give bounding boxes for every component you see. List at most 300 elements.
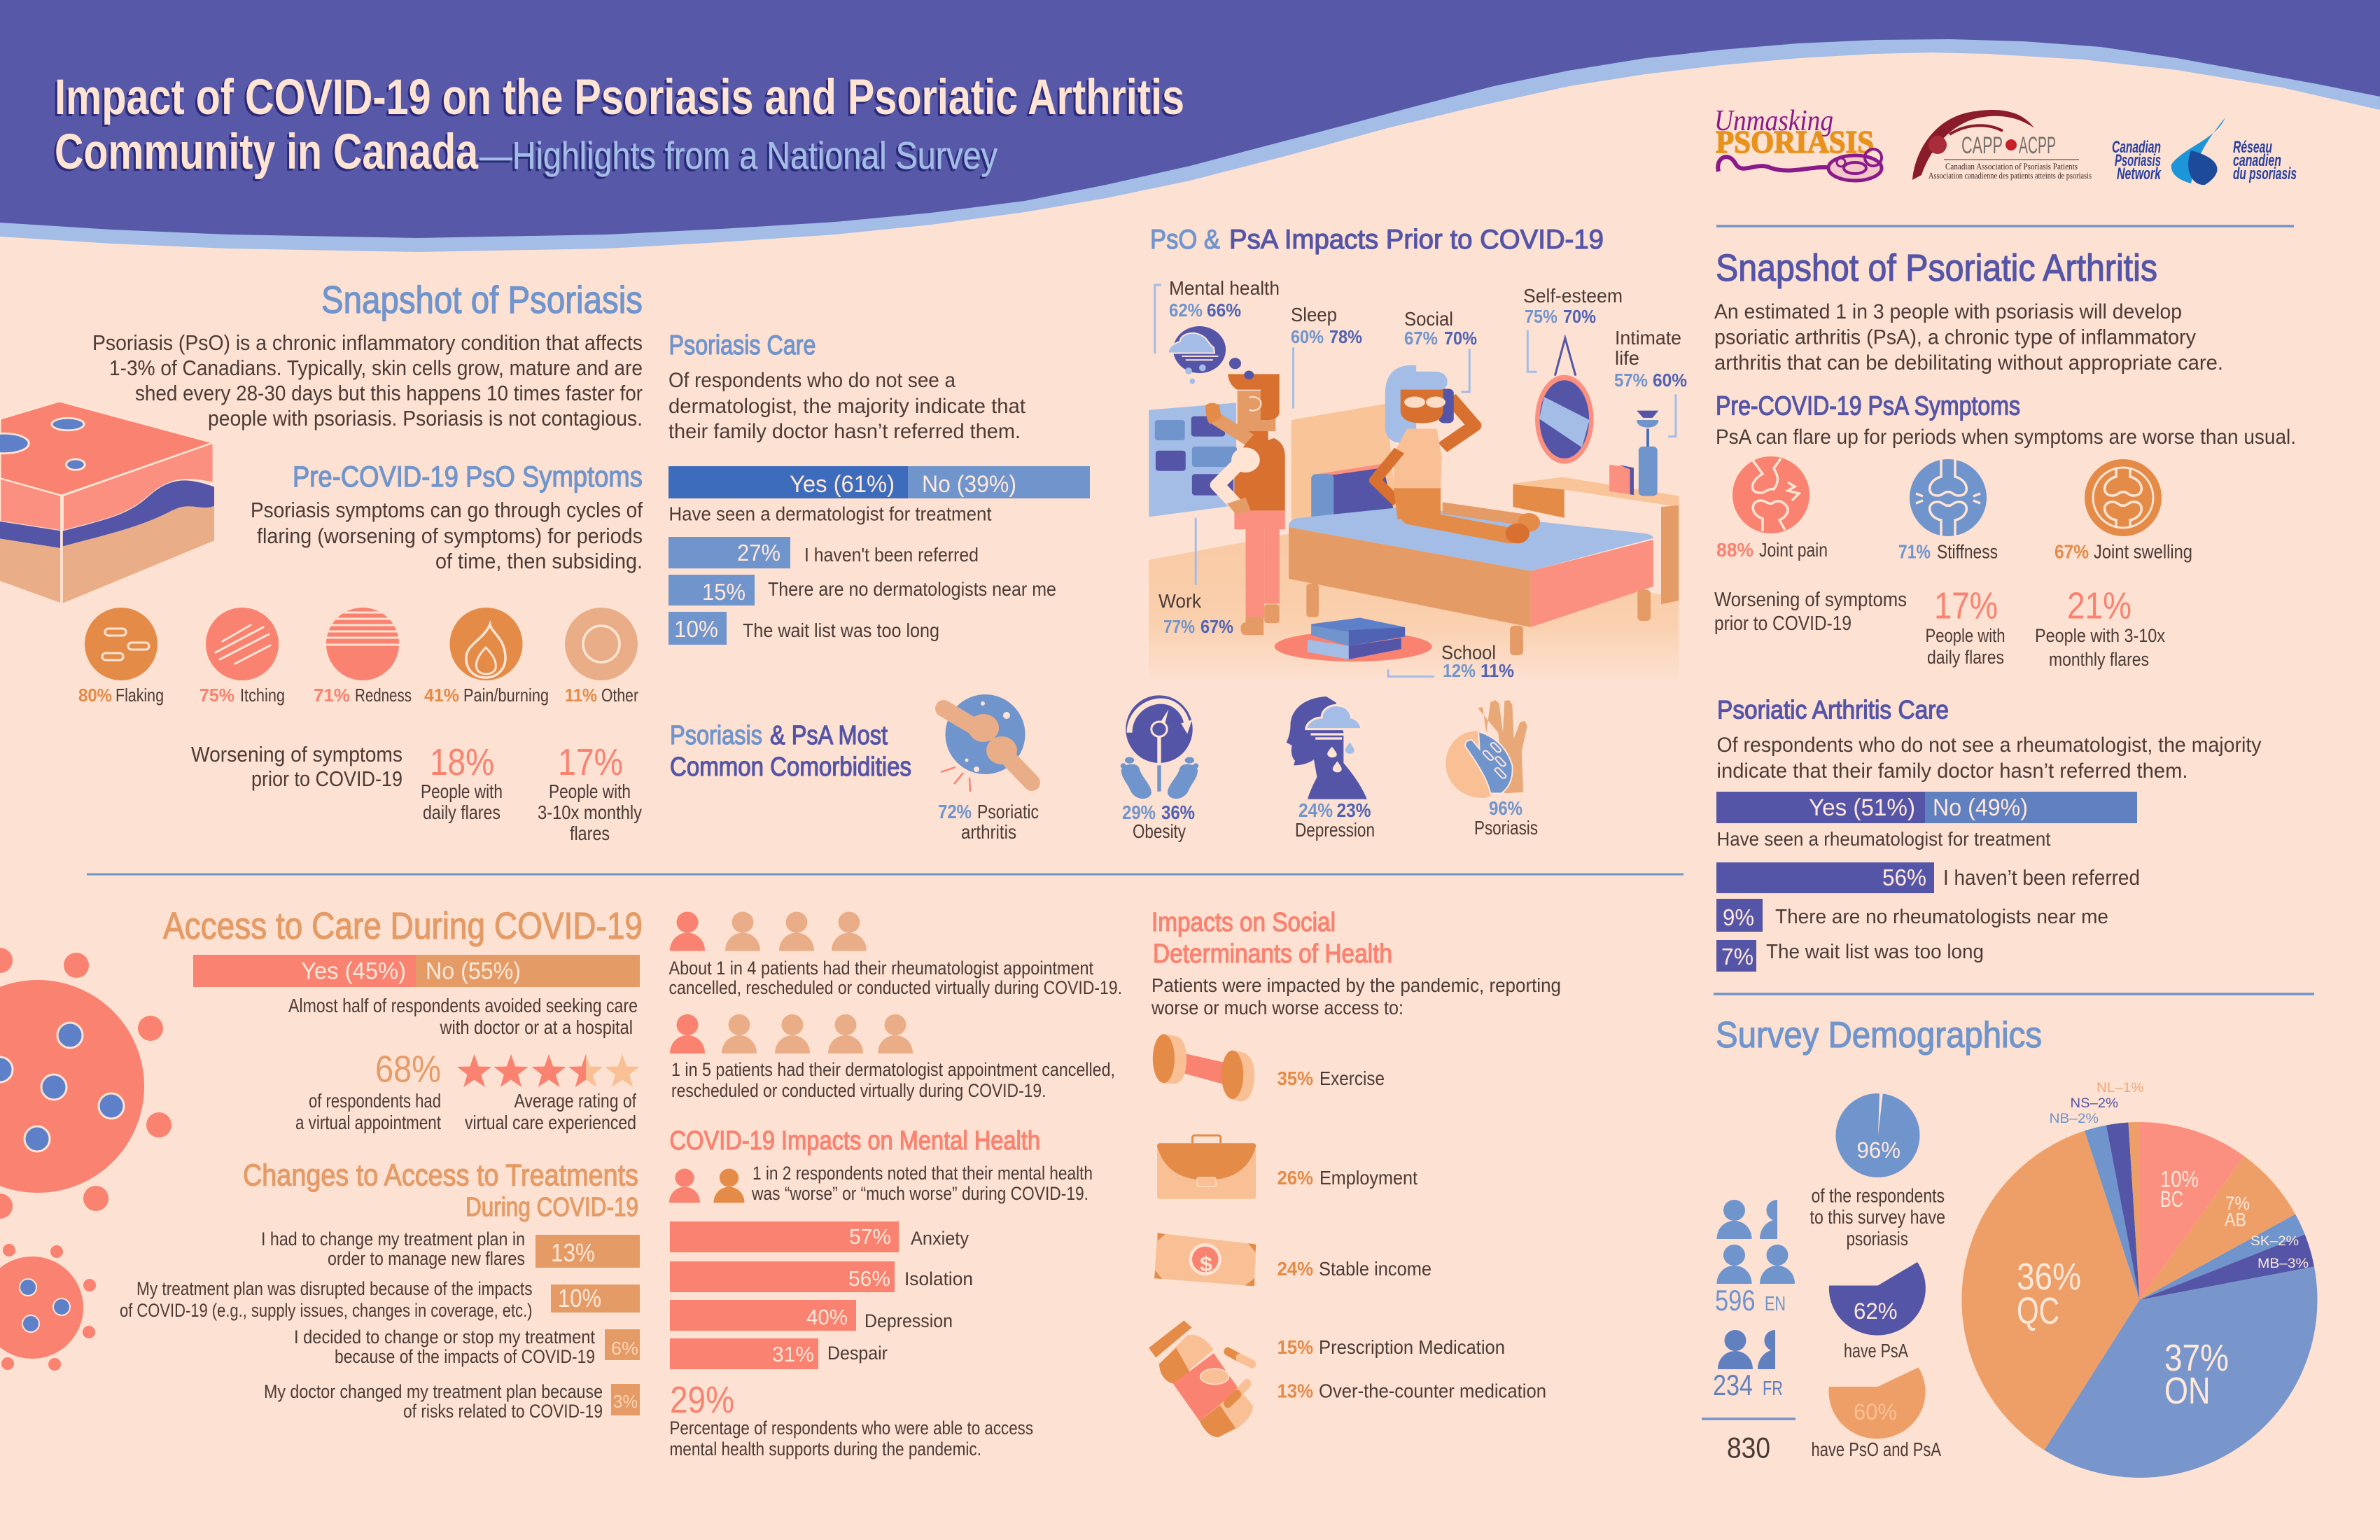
caption (288, 995, 638, 1038)
care text: dermatologist, the majority indicate that (668, 395, 1026, 418)
logo: CAPP ACPP: ACPP (2019, 132, 2056, 159)
label: employment (1277, 1167, 1418, 1189)
symptom labels: Itching (240, 685, 285, 706)
logo: Canadian Psoriasis Network: Canadian (2112, 138, 2161, 157)
stacked bar: yes no rheumatologist: Yes (51%) (1809, 794, 1915, 821)
heading: changes to access: Changes to Access to Treatments (243, 1158, 638, 1193)
heading: Snapshot of Psoriatic Arthritis (1716, 247, 2157, 289)
label: self-esteem: Self-esteem (1523, 285, 1623, 307)
bar chart: mental health impacts: Despair (827, 1343, 888, 1364)
label: stable income: Stable income (1319, 1258, 1432, 1280)
label: intimate life: 57% (1614, 370, 1648, 391)
illustration: skin layers block (0, 401, 214, 603)
stacked bar: avoided care: Yes (45%) (301, 958, 406, 984)
row: plan disrupted (120, 1278, 640, 1321)
label: obesity (1122, 802, 1195, 842)
logo: CAPP ACPP: CAPP (1961, 132, 2003, 159)
label: over-the-counter medication: Over-the-counter medication (1319, 1380, 1546, 1401)
illustration: bedroom scene (1149, 285, 1679, 682)
icon: joint (941, 694, 1032, 792)
label: joint swelling: Joint swelling (2094, 540, 2192, 563)
heading: PsA Impacts Prior to COVID-19 (1229, 225, 1604, 255)
panel: snapshot of psoriasis (0, 278, 643, 844)
label: stable income (1277, 1258, 1432, 1280)
people: french respondents: FR (1763, 1378, 1783, 1400)
label: intimate life: Intimate (1615, 327, 1681, 349)
label: work: Work (1158, 590, 1202, 612)
label: obesity: Obesity (1133, 820, 1186, 842)
heading: Psoriasis (670, 721, 762, 750)
worsening of psa symptoms: Worsening of symptoms (1714, 589, 1907, 611)
label: mental health: 66% (1207, 300, 1241, 321)
care text: Of respondents who do not see a (668, 369, 955, 392)
heading: Psoriasis Care (669, 330, 816, 360)
label: depression: 23% (1337, 799, 1371, 821)
stacked bar: yes no dermatologist (668, 466, 1090, 498)
label: social: 70% (1444, 328, 1477, 349)
heading: Determinants of Health (1153, 939, 1392, 969)
bar: wait list: The wait list was too long (1766, 941, 1984, 963)
worsening of symptoms: flares (570, 822, 610, 844)
icon: dumbbell (1153, 1034, 1254, 1102)
text: worse or much worse access to: (1151, 997, 1404, 1018)
pie chart: provinces: ON (2164, 1370, 2211, 1412)
people: english respondents: 596 (1715, 1284, 1756, 1317)
bar chart: mental health impacts: 57% (849, 1224, 891, 1249)
bar chart: mental health impacts: Isolation (904, 1268, 973, 1289)
intro text: people with psoriasis. Psoriasis is not contagious. (208, 406, 643, 430)
label: exercise: Exercise (1320, 1068, 1385, 1089)
stat: mental health supports: Percentage of respondents who were able to access (669, 1418, 1033, 1438)
panel: comorbidities (670, 694, 1538, 843)
text: rheumatologist appointments: cancelled, rescheduled or conducted virtually during COVID-19. (669, 977, 1122, 998)
intro text: An estimated 1 in 3 people with psoriasis will develop (1714, 300, 2182, 323)
logo: Canadian Psoriasis Network: Réseau (2233, 138, 2272, 157)
row: decided to stop: because of the impacts of COVID-19 (335, 1346, 595, 1367)
icon: briefcase (1157, 1135, 1256, 1199)
pie chart: provinces: BC (2160, 1186, 2183, 1212)
logo: Canadian Psoriasis Network: Psoriasis (2115, 151, 2161, 170)
bar: wait list: The wait list was too long (743, 620, 939, 641)
heading (1152, 908, 1392, 969)
bar: not referred: 56% (1882, 864, 1926, 890)
text: 1 in 2 respondents (751, 1163, 1093, 1204)
bar: no dermatologists: 15% (702, 579, 746, 605)
caption: have pso and psa: have PsO and PsA (1812, 1438, 1941, 1460)
label: school: 11% (1480, 660, 1514, 681)
label: depression: 24% (1298, 799, 1333, 821)
text: dermatologist appointments: 1 in 5 patients had their dermatologist appointment cancelled, (671, 1059, 1115, 1080)
label: exercise (1277, 1068, 1385, 1089)
logo: Canadian Psoriasis Network: Network (2117, 164, 2162, 183)
label: sleep: 78% (1329, 326, 1362, 347)
title: Impact of COVID-19 on the Psoriasis and Psoriatic Arthritis (52, 72, 1182, 127)
label: sleep: Sleep (1291, 304, 1337, 326)
mini pie: 62 percent: 62% (1854, 1298, 1897, 1324)
worsening of psa symptoms: People with 3-10x (2035, 625, 2165, 646)
stacked bar: yes no dermatologist: Yes (61%) (790, 471, 895, 498)
heading: pre-covid psa symptoms: Pre-COVID-19 PsA Symptoms (1716, 392, 2020, 421)
logo: Unmasking Psoriasis: PSORIASIS (1716, 124, 1874, 160)
bar: no rheumatologists: 9% (1723, 904, 1754, 930)
bar chart: mental health impacts: 40% (806, 1305, 848, 1329)
logo: Canadian Psoriasis Network: du psoriasis (2233, 164, 2297, 183)
mini pie: 96 percent: 96% (1856, 1138, 1900, 1163)
bar chart: mental health impacts: Depression (864, 1310, 953, 1331)
people: 1 in 4 (670, 911, 867, 951)
symptom labels: Pain/burning (463, 685, 549, 706)
caption: 96 percent: psoriasis (1847, 1228, 1908, 1250)
people: french respondents: 234 (1713, 1368, 1753, 1401)
caption: Have seen a dermatologist for treatment (669, 503, 992, 525)
label: stiffness: 71% (1898, 540, 1931, 563)
logo: CAPP ACPP (1912, 110, 2092, 181)
stat: virtual appointment: 68% (375, 1049, 441, 1091)
label: prescription medication: Prescription Medication (1319, 1336, 1505, 1358)
mini pie: 60 percent: 60% (1854, 1399, 1897, 1424)
care text: their family doctor hasn’t referred them. (668, 420, 1021, 443)
symptoms text: of time, then subsiding. (435, 549, 643, 573)
icon: flaking (85, 608, 158, 680)
people: english respondents: EN (1765, 1293, 1786, 1315)
symptoms text: Psoriasis symptoms can go through cycles of (251, 498, 643, 522)
row: manage new flares: order to manage new flares (328, 1248, 525, 1269)
label: psoriatic arthritis (938, 801, 1039, 843)
label: psoriatic arthritis: Psoriatic (977, 801, 1039, 822)
pie chart: provinces: MB–3% (2258, 1256, 2309, 1271)
people: french respondents (1713, 1330, 1783, 1401)
text: 1 in 2 respondents: 1 in 2 respondents noted that their mental health (752, 1163, 1093, 1184)
panel: psoriatic arthritis care (1716, 696, 2261, 972)
pie chart: provinces (1961, 1122, 2318, 1478)
label: intimate life: life (1615, 347, 1639, 369)
panel: survey demographics (1702, 1015, 2318, 1478)
heading: Survey Demographics (1716, 1015, 2042, 1056)
bar: wait list (668, 612, 939, 645)
label: work: 67% (1200, 616, 1233, 637)
worsening of psa symptoms: prior to COVID-19 (1714, 612, 1851, 635)
label: psoriatic arthritis: 72% (938, 801, 972, 822)
caption: 96 percent (1810, 1184, 1945, 1250)
bar: no rheumatologists (1716, 899, 2108, 932)
label: joint swelling: 67% (2054, 540, 2089, 563)
people: 1 in 5 (670, 1014, 913, 1054)
stat: mental health supports: 29% (670, 1379, 734, 1421)
heading: Snapshot of Psoriasis (321, 278, 643, 321)
logo: Canadian Psoriasis Network: canadien (2233, 151, 2281, 170)
total respondents: 830 (1727, 1431, 1770, 1464)
stacked bar: yes no dermatologist: No (39%) (922, 471, 1016, 498)
label: employment: 26% (1277, 1167, 1313, 1189)
pie chart: provinces: QC (2017, 1290, 2059, 1332)
worsening of psa symptoms: People with (1925, 625, 2005, 646)
label: depression: Depression (1295, 819, 1375, 841)
label: social: 67% (1404, 328, 1438, 349)
label: joint pain (1716, 539, 1828, 561)
label: school: School (1441, 641, 1496, 664)
intro text (1714, 300, 2223, 374)
bar chart: mental health impacts: 31% (772, 1342, 814, 1366)
label: mental health: 62% (1169, 300, 1203, 321)
bar: no dermatologists (668, 575, 1056, 606)
symptoms text: flaring (worsening of symptoms) for periods (257, 524, 643, 548)
bar: not referred: 27% (737, 540, 780, 566)
label: depression (1295, 799, 1375, 841)
icon: depression head (1287, 696, 1367, 799)
logo: Unmasking Psoriasis (1714, 105, 1882, 181)
stat: virtual appointment (295, 1049, 441, 1133)
row: doctor changed plan: 3% (613, 1391, 638, 1412)
logo: Unmasking Psoriasis: Unmasking (1714, 105, 1833, 137)
symptom labels (78, 685, 638, 706)
pie chart: provinces: 7% (2225, 1193, 2250, 1214)
worsening of psa symptoms: monthly flares (2049, 649, 2149, 670)
title: —Highlights from a National Survey (477, 136, 995, 179)
pie labels outside: NB–2% (2050, 1112, 2099, 1126)
label: joint swelling (2054, 540, 2192, 563)
heading: pre-covid symptoms: Pre-COVID-19 PsO Symptoms (293, 460, 643, 493)
care text: Of respondents who do not see a rheumatologist, the majority (1716, 734, 2261, 757)
worsening of symptoms: 17% (558, 741, 623, 783)
text: rheumatologist appointments (669, 958, 1122, 998)
caption: with doctor or at a hospital (440, 1016, 633, 1038)
row: plan disrupted: 10% (558, 1284, 601, 1312)
panel: impacts prior to covid (1149, 225, 1687, 682)
star rating: virtual care experienced (465, 1112, 636, 1133)
bar: no dermatologists: There are no dermatologists near me (768, 578, 1056, 600)
logo: CAPP ACPP: Canadian Association of Psoriasis Patients (1945, 161, 2078, 172)
label: stiffness: Stiffness (1937, 540, 1998, 563)
bar chart: mental health impacts (670, 1222, 973, 1369)
worsening of symptoms (191, 741, 642, 844)
title: —Highlights from a National Survey (479, 134, 997, 177)
heading: & PsA Most (770, 721, 888, 750)
symptom labels: 75% (200, 685, 234, 706)
worsening of psa symptoms: daily flares (1927, 647, 2004, 668)
bar: not referred (668, 537, 979, 568)
illustration: large virus (0, 948, 172, 1219)
label: stiffness (1898, 540, 1998, 563)
label: self-esteem: 75% (1525, 306, 1558, 327)
worsening of symptoms: People with (549, 780, 631, 802)
symptom labels: Redness (355, 685, 412, 706)
bar chart: mental health impacts: 56% (848, 1266, 890, 1291)
caption: have psa: have PsA (1844, 1340, 1908, 1362)
row: plan disrupted: of COVID-19 (e.g., supply issues, changes in coverage, etc.) (120, 1300, 532, 1321)
heading (670, 721, 911, 782)
label: self-esteem: 70% (1563, 306, 1596, 327)
logo: CAPP ACPP: Association canadienne des patients atteints de psoriasis (1928, 170, 2092, 181)
symptom labels: 80% (78, 685, 112, 706)
heading: PsO & (1150, 225, 1220, 255)
icon: itching (206, 608, 279, 680)
row: plan disrupted: My treatment plan was disrupted because of the impacts (136, 1278, 532, 1299)
star rating: Average rating of (514, 1090, 636, 1112)
intro text: Psoriasis (PsO) is a chronic inflammatory condition that affects (92, 330, 643, 355)
stacked bar: avoided care (193, 955, 640, 987)
intro text: 1-3% of Canadians. Typically, skin cells grow, mature and are (109, 356, 643, 380)
symptom labels: 11% (565, 685, 597, 706)
stat: virtual appointment: of respondents had (309, 1090, 441, 1112)
people: english respondents (1715, 1200, 1795, 1317)
label: joint pain: 88% (1716, 539, 1754, 561)
title: Community in Canada (55, 125, 478, 180)
label: obesity: 36% (1161, 802, 1195, 823)
worsening of symptoms: Worsening of symptoms (191, 742, 402, 766)
caption: 96 percent: of the respondents (1812, 1184, 1945, 1207)
worsening of symptoms: 3-10x monthly (538, 802, 642, 823)
pie chart: provinces: 37% (2164, 1337, 2229, 1379)
label: mental health: Mental health (1169, 277, 1280, 299)
text: Patients were impacted by the pandemic, reporting (1152, 974, 1561, 996)
worsening of symptoms: daily flares (423, 802, 500, 823)
icon: redness (326, 608, 399, 680)
pie chart: provinces: SK–2% (2250, 1234, 2299, 1249)
text: rheumatologist appointments: About 1 in 4 patients had their rheumatologist appointment (669, 958, 1094, 979)
icon: pill bottle (1149, 1320, 1253, 1437)
label: prescription medication: 15% (1277, 1336, 1313, 1358)
panel: appointments and mental health (669, 911, 1122, 1460)
bar: not referred: I haven't been referred (804, 544, 979, 566)
logo: Canadian Psoriasis Network (2112, 118, 2297, 185)
intro text (92, 330, 643, 430)
title: Community in Canada (52, 127, 476, 182)
stat: mental health supports (669, 1379, 1033, 1460)
heading: Access to Care During COVID-19 (163, 905, 643, 947)
symptom labels: 71% (314, 685, 350, 706)
label: psoriasis (1474, 797, 1538, 839)
text: dermatologist appointments (671, 1059, 1115, 1101)
worsening of psa symptoms: 17% (1934, 585, 1998, 627)
pie labels outside (2050, 1081, 2144, 1126)
intro text: psoriatic arthritis (PsA), a chronic type of inflammatory (1714, 326, 2196, 349)
worsening of psa symptoms: 21% (2067, 585, 2132, 627)
glyph: dollar sign: $ (1200, 1253, 1212, 1276)
caption: 96 percent: to this survey have (1810, 1206, 1945, 1228)
bar chart: mental health impacts: Anxiety (911, 1228, 969, 1249)
flare text: PsA can flare up for periods when symptoms are worse than usual. (1716, 426, 2296, 449)
pie labels outside: NL–1% (2096, 1081, 2144, 1096)
worsening of symptoms: 18% (430, 741, 494, 783)
people: 1 in 2 (669, 1169, 745, 1203)
icon: obesity scale (1121, 695, 1198, 799)
label: joint pain: Joint pain (1759, 539, 1828, 561)
heading: changes to access (243, 1158, 638, 1222)
worsening of symptoms: People with (421, 780, 503, 802)
row: decided to stop: I decided to change or stop my treatment (294, 1326, 595, 1348)
label: social (1404, 308, 1477, 349)
icon: joint pain (1732, 456, 1809, 533)
label: psoriasis: Psoriasis (1474, 817, 1538, 839)
label: exercise: 35% (1277, 1068, 1313, 1089)
icon: stiffness (1910, 459, 1987, 536)
worsening of symptoms: prior to COVID-19 (251, 766, 402, 791)
pie chart: provinces: 10% (2160, 1166, 2199, 1191)
worsening of psa symptoms (1714, 585, 2165, 670)
label: employment: Employment (1320, 1167, 1418, 1189)
row: manage new flares: I had to change my treatment plan in (261, 1228, 525, 1250)
label: social: Social (1404, 308, 1453, 330)
row: manage new flares (261, 1228, 640, 1269)
symptom labels: Other (601, 685, 638, 706)
bar: not referred: I haven’t been referred (1943, 865, 2140, 890)
heading: Impacts on Social (1152, 908, 1336, 937)
bar: wait list (1716, 940, 1984, 972)
icon: money (1154, 1233, 1256, 1286)
stacked bar: yes no rheumatologist (1716, 792, 2137, 823)
intro text: shed every 28-30 days but this happens 10 times faster for (135, 381, 643, 405)
label: obesity: 29% (1122, 802, 1156, 823)
row: decided to stop (294, 1326, 640, 1367)
mini pie: 60 percent (1829, 1368, 1926, 1438)
label: stable income: 24% (1277, 1258, 1313, 1280)
heading: Psoriatic Arthritis Care (1717, 696, 1949, 724)
bar: not referred (1716, 862, 2140, 893)
caption: Have seen a rheumatologist for treatment (1716, 828, 2051, 850)
star rating (457, 1054, 640, 1133)
heading: mental health: COVID-19 Impacts on Mental Health (669, 1126, 1040, 1156)
bar: wait list: 10% (674, 616, 718, 642)
row: doctor changed plan (264, 1381, 640, 1422)
panel: social determinants of health (1149, 908, 1561, 1437)
caption: Almost half of respondents avoided seeking care (288, 995, 638, 1016)
icon: joint swelling (2085, 459, 2162, 536)
icon: pain burning (449, 608, 522, 680)
row: doctor changed plan: of risks related to COVID-19 (403, 1401, 603, 1422)
panel: access to care during covid (0, 905, 643, 1422)
title (52, 70, 1184, 182)
heading: changes to access: During COVID-19 (465, 1193, 638, 1222)
care text: indicate that their family doctor hasn’t referred them. (1716, 760, 2188, 783)
care text (1716, 734, 2261, 783)
heading: Common Comorbidities (670, 752, 911, 782)
label: intimate life: 60% (1653, 370, 1687, 391)
symptom labels: Flaking (115, 685, 164, 706)
care text (668, 369, 1026, 443)
row: decided to stop: 6% (611, 1338, 638, 1359)
panel: psoriasis care (668, 330, 1090, 645)
stacked bar: avoided care: No (55%) (426, 958, 521, 984)
label: intimate life (1614, 327, 1687, 391)
header banner (0, 0, 2380, 252)
icon: psoriasis hand (1446, 700, 1527, 798)
text: dermatologist appointments: rescheduled or conducted virtually during COVID-19. (671, 1080, 1046, 1101)
pie labels outside: NS–2% (2071, 1096, 2118, 1111)
label: school: 12% (1443, 660, 1476, 681)
label: over-the-counter medication: 13% (1277, 1380, 1313, 1401)
bar: wait list: 7% (1721, 944, 1754, 969)
label: self-esteem (1523, 285, 1623, 327)
label: psoriasis: 96% (1489, 797, 1522, 819)
label: sleep (1291, 304, 1362, 347)
pie chart: provinces: 36% (2017, 1256, 2081, 1298)
mini pie: 62 percent (1829, 1262, 1926, 1336)
title: Impact of COVID-19 on the Psoriasis and Psoriatic Arthritis (55, 70, 1184, 125)
text: 1 in 2 respondents: was “worse” or “much worse” during COVID-19. (751, 1183, 1088, 1204)
illustration: small virus (0, 1244, 96, 1371)
label: work: 77% (1163, 616, 1195, 637)
panel: snapshot of psoriatic arthritis (1714, 226, 2296, 670)
row: manage new flares: 13% (551, 1238, 595, 1267)
intro text: arthritis that can be debilitating without appropriate care. (1714, 351, 2223, 374)
text (1151, 974, 1561, 1018)
label: work (1158, 590, 1233, 637)
stat: mental health supports: mental health supports during the pandemic. (669, 1438, 981, 1460)
mini pie: 96 percent (1835, 1092, 1919, 1177)
bar: no rheumatologists: There are no rheumatologists near me (1775, 906, 2108, 928)
label: mental health (1169, 277, 1280, 321)
label: sleep: 60% (1291, 326, 1324, 347)
